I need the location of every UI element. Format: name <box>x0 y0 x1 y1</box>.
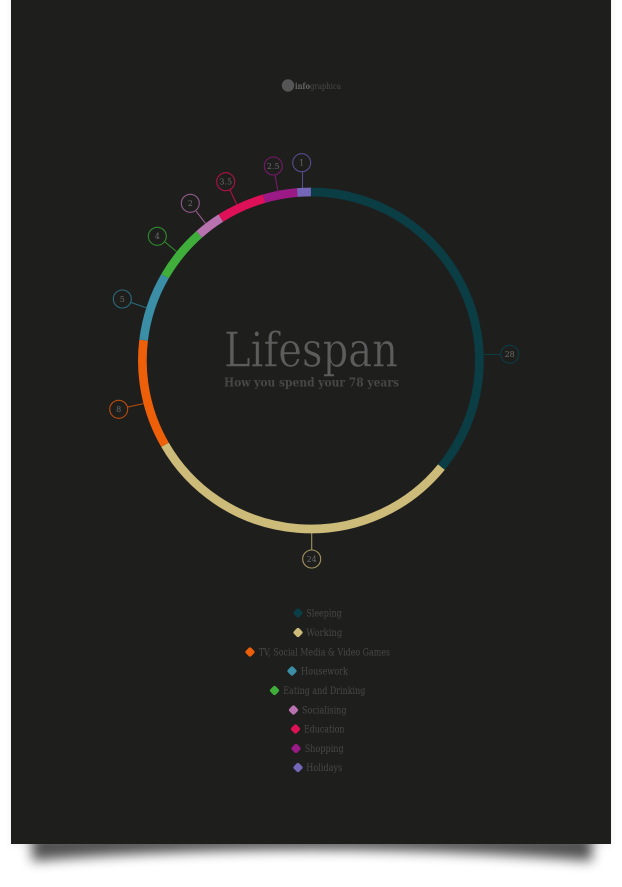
segment: housework 5 <box>144 276 165 340</box>
callout: 5 <box>113 290 147 308</box>
subtitle: How you spend your 78 years <box>224 376 399 390</box>
callout: 24 <box>303 533 321 568</box>
segment: sleeping 28 <box>311 192 479 467</box>
legend item: socialising: Socialising <box>302 706 347 716</box>
callout: 1 <box>293 154 311 188</box>
callout: 4 <box>148 227 177 252</box>
legend item: housework <box>287 666 349 678</box>
value callouts <box>110 154 519 568</box>
segment: education 3.5 <box>221 199 264 218</box>
legend item: working <box>293 627 343 639</box>
legend item: socialising <box>288 705 347 716</box>
legend <box>245 608 390 774</box>
legend item: TV, social media and video games <box>245 647 390 658</box>
legend item: TV, social media and video games: TV, Social Media & Video Games <box>259 648 390 658</box>
logo: infographica: info <box>295 81 311 91</box>
callout: 2 <box>181 194 206 224</box>
legend item: sleeping: Sleeping <box>306 608 342 620</box>
callout: 1: 1 <box>299 159 304 168</box>
callout: 2.5: 2.5 <box>267 162 280 171</box>
logo: infographica <box>282 79 341 92</box>
legend item: working: Working <box>306 628 343 639</box>
poster drop shadow <box>32 835 592 861</box>
callout: 24: 24 <box>307 555 317 564</box>
legend item: housework: Housework <box>301 666 349 678</box>
logo: infographica: graphica <box>310 82 341 91</box>
legend item: eating and drinking <box>269 685 366 697</box>
callout: 28: 28 <box>505 350 515 359</box>
legend item: shopping: Shopping <box>305 744 344 755</box>
callout: 8: 8 <box>116 405 121 414</box>
legend item: education: Education <box>304 724 345 736</box>
callout: 3.5: 3.5 <box>219 178 232 187</box>
segment: holidays 1 <box>297 188 311 197</box>
callout: 5: 5 <box>120 295 125 304</box>
segment: socialising 2 <box>199 218 221 234</box>
segment: working 24 <box>165 445 441 529</box>
callout: 28 <box>484 345 519 363</box>
legend item: holidays: Holidays <box>306 763 342 774</box>
callout: 2.5 <box>264 157 282 192</box>
legend item: sleeping <box>293 608 342 620</box>
ring chart: how 78 years are spent <box>142 192 479 529</box>
title: Lifespan <box>224 322 398 378</box>
legend item: eating and drinking: Eating and Drinking <box>283 686 366 697</box>
legend item: education <box>290 724 345 736</box>
callout: 8 <box>110 400 144 418</box>
callout: 2: 2 <box>188 199 193 208</box>
legend item: holidays <box>293 762 342 774</box>
segment: shopping 2.5 <box>264 192 297 199</box>
legend item: shopping <box>291 743 344 755</box>
callout: 4: 4 <box>155 232 160 241</box>
callout: 3.5 <box>217 173 237 205</box>
segment: TV, social media and video games 8 <box>142 340 165 445</box>
segment: eating and drinking 4 <box>165 234 199 276</box>
